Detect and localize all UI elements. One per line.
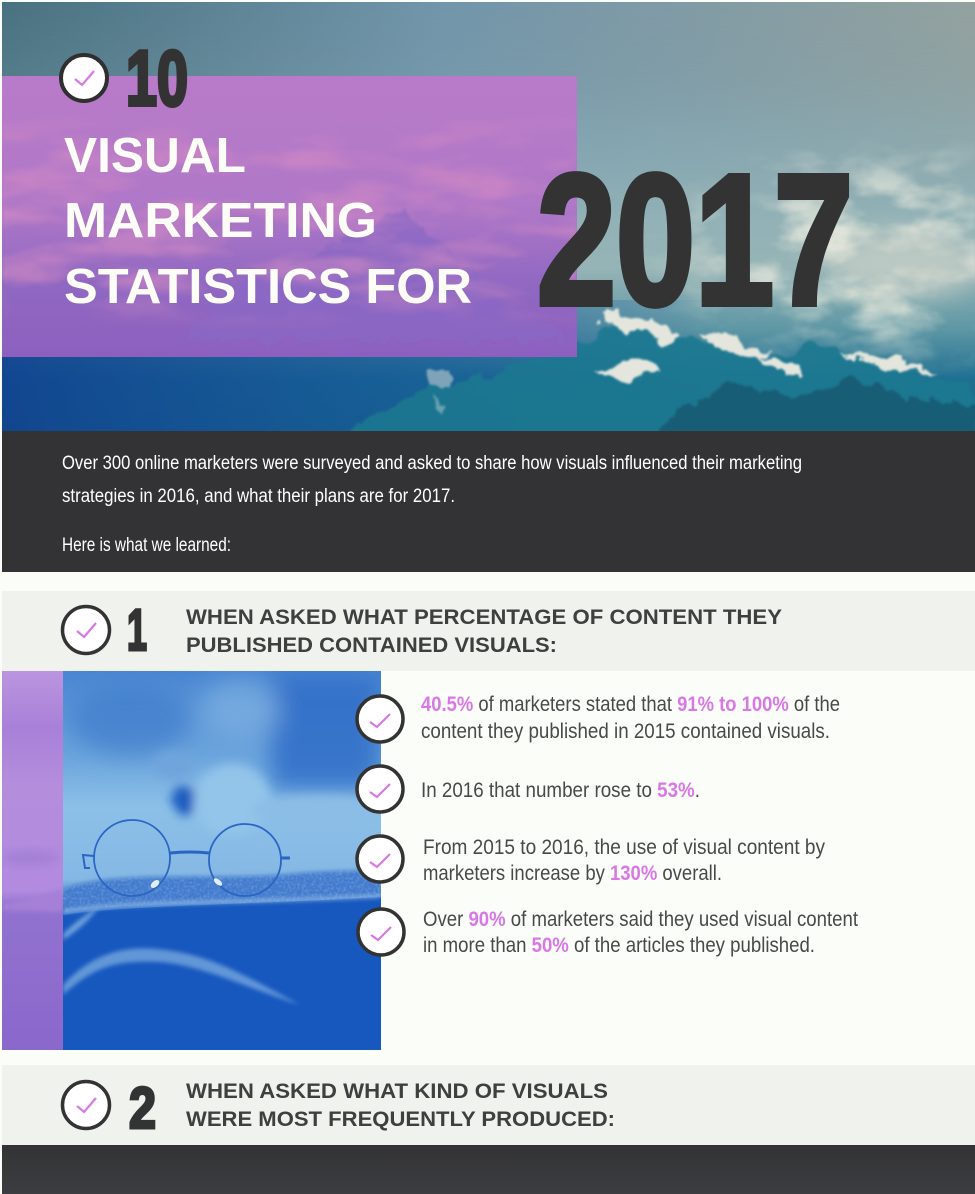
title year: 2017: 2017 (537, 137, 853, 344)
title: visual marketing statistics for: STATISTICS FOR (64, 260, 472, 314)
photo: round glasses on blue fabric (63, 671, 390, 1050)
title: visual marketing statistics for (64, 129, 472, 314)
title: visual marketing statistics for: VISUAL (64, 129, 246, 183)
panel: intro text band (2, 431, 975, 572)
text: stat 3 (423, 836, 825, 885)
icon: hero check badge (61, 55, 107, 101)
text: stat 4: in more than 50% of the articles they published. (423, 934, 815, 957)
panel: intro text band: Over 300 online marketers were surveyed and asked to share how visuals influenced their marketing (62, 453, 802, 474)
icon: check badge 3 (357, 836, 403, 882)
hero photo: clouds and mountains (0, 0, 975, 440)
text: stat 1: 40.5% of marketers stated that 91% to 100% of the (421, 693, 840, 716)
panel: intro text band: Here is what we learned: (62, 535, 231, 556)
text: stat 2: In 2016 that number rose to 53%. (421, 779, 700, 802)
panel: section 1 header: PUBLISHED CONTAINED VISUALS: (186, 634, 557, 657)
text: stat 4 (423, 908, 858, 957)
panel: section 1 header: 1 (127, 598, 147, 663)
panel: section 2 header (2, 1065, 975, 1145)
panel: section 2 header: WERE MOST FREQUENTLY PRODUCED: (186, 1108, 615, 1131)
text: stat 3: marketers increase by 130% overall. (423, 862, 722, 885)
icon: check badge 2 (357, 766, 403, 812)
text: stat 1 second line: content they published in 2015 contained visuals. (421, 720, 830, 743)
panel: section 1 header: WHEN ASKED WHAT PERCENTAGE OF CONTENT THEY (186, 606, 782, 629)
text: stat 4: Over 90% of marketers said they used visual content (423, 908, 858, 931)
text: stat 3: From 2015 to 2016, the use of visual content by (423, 836, 825, 859)
icon: check badge 4 (358, 909, 404, 955)
title: visual marketing statistics for: MARKETING (64, 194, 377, 248)
panel: section 1 header (2, 591, 975, 671)
panel: intro text band: strategies in 2016, and what their plans are for 2017. (62, 486, 455, 507)
panel: purple title block (2, 76, 577, 357)
panel: section 2 header: WHEN ASKED WHAT KIND OF VISUALS (186, 1080, 608, 1103)
panel: section 2 header: 2 (129, 1076, 156, 1141)
panel: purple photo strip (0, 671, 63, 1050)
heading number: 10: 10 (126, 34, 188, 122)
icon: check badge 1 (357, 696, 403, 742)
panel: dark band for section 2 (2, 1145, 975, 1194)
